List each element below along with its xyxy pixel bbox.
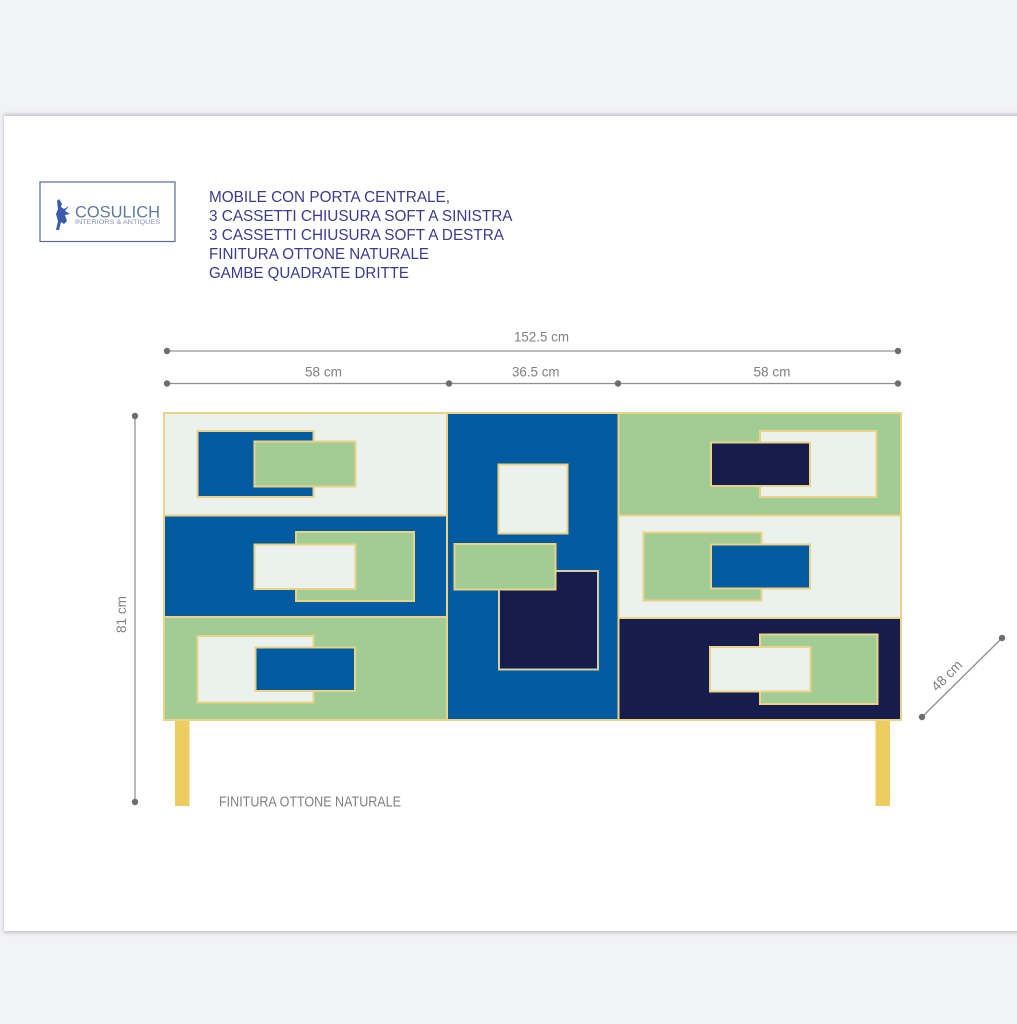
dimension: height [113,413,138,805]
dimension: depth [919,635,1005,720]
white sheet [4,116,1017,931]
centre door [447,413,618,720]
cabinet legs [175,720,890,806]
heading text block [209,189,513,282]
logo [40,182,175,242]
cabinet [164,413,901,720]
logo name: COSULICH [75,202,160,222]
logo tagline: INTERIORS & ANTIQUES [75,219,161,226]
dimension: depth: 48 cm [928,657,965,694]
dimension: section widths: 58 cm [754,364,790,380]
sheet shadow [4,114,1017,933]
dimension: height: 81 cm [113,596,129,633]
icon: logo figure [56,199,70,230]
dimension: total width [164,328,901,354]
right drawer 1 [618,413,901,516]
heading text block: 3 CASSETTI CHIUSURA SOFT A SINISTRA [209,208,513,225]
left drawer 1 [164,413,447,516]
dimension: section widths: 58 cm [305,364,342,380]
heading text block: FINITURA OTTONE NATURALE [209,246,429,263]
dimension: total width: 152.5 cm [514,328,569,344]
heading text block: 3 CASSETTI CHIUSURA SOFT A DESTRA [209,227,504,244]
dimension: section widths [164,364,901,387]
heading text block: GAMBE QUADRATE DRITTE [209,265,409,282]
right drawer 2 [618,516,901,618]
right drawer 3 [618,618,901,720]
dimension: section widths: 36.5 cm [512,364,560,380]
left drawer 2 [164,516,447,617]
heading text block: MOBILE CON PORTA CENTRALE, [209,189,450,206]
finish label: FINITURA OTTONE NATURALE [219,794,401,810]
left drawer 3 [164,617,447,720]
